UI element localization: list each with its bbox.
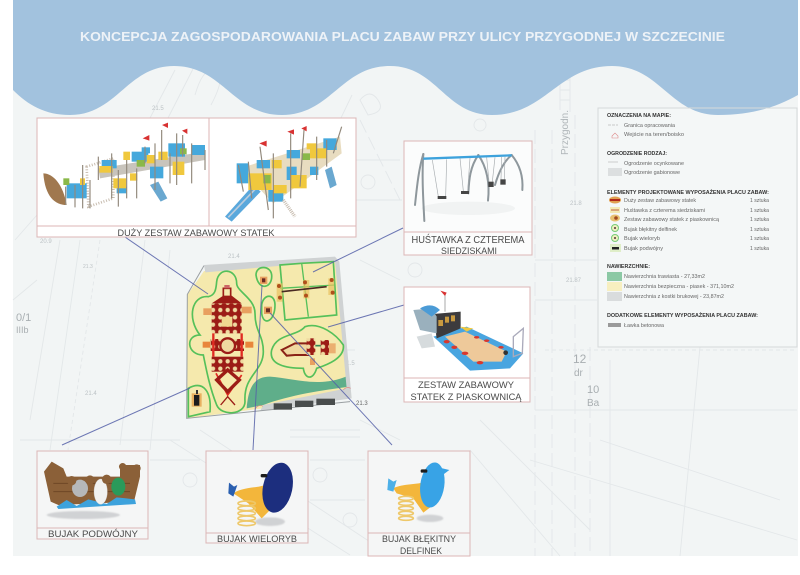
caption: BUJAK BŁĘKITNY <box>382 534 456 544</box>
legend group: equipment: Bujak podwójny <box>624 246 664 252</box>
play structure: ship with sandpit <box>282 338 336 365</box>
map background: Przygodn. <box>560 110 571 155</box>
play structure: swing <box>277 278 335 302</box>
caption: STATEK Z PIASKOWNICĄ <box>410 392 522 403</box>
legend group: fencing: Ogrodzenie ocynkowane <box>624 161 684 167</box>
panel: dolphin rocker <box>368 451 470 556</box>
map background: dr <box>574 368 584 379</box>
map background: 21.4 <box>85 391 97 397</box>
panel: ship with sandpit <box>404 287 530 403</box>
play structure: large ship <box>203 285 253 405</box>
legend group: equipment: 1 sztuka <box>750 236 769 242</box>
map background: 21.3 <box>356 401 368 407</box>
connector lines <box>62 228 404 450</box>
header wave band <box>13 0 798 115</box>
surface: grass <box>247 376 350 408</box>
caption <box>412 233 524 257</box>
image: sandpit ship <box>413 291 523 371</box>
legend group: equipment: Huśtawka z czterema siedziskami <box>624 208 705 214</box>
map background: 10 <box>587 384 599 396</box>
legend group: additional <box>607 312 758 329</box>
map background: 21.5 <box>343 361 355 367</box>
entrances <box>255 388 351 411</box>
legend group: equipment: Duży zestaw zabawowy statek <box>624 198 697 204</box>
panel: swing <box>404 141 532 257</box>
legend group: equipment: ELEMENTY PROJEKTOWANE WYPOSAŻENIA PLACU ZABAW: <box>607 189 769 196</box>
image: double rocker <box>44 462 141 519</box>
caption: BUJAK PODWÓJNY <box>48 529 138 539</box>
caption: DUŻY ZESTAW ZABAWOWY STATEK <box>118 228 275 239</box>
map background: 21.87 <box>566 278 582 284</box>
image: dolphin rocker <box>387 461 449 522</box>
legend group: surfaces <box>607 264 734 301</box>
caption <box>382 534 456 556</box>
panel: double rocker <box>37 451 148 539</box>
legend group: map markings <box>607 113 684 138</box>
legend group: equipment: 1 sztuka <box>750 208 769 214</box>
legend group: map markings: OZNACZENIA NA MAPIE: <box>607 113 671 119</box>
legend group: equipment: Bujak wieloryb <box>624 236 660 242</box>
legend group: fencing: Ogrodzenie gabionowe <box>624 170 680 176</box>
legend group: surfaces: Nawierzchnia bezpieczna - piasek - 371,10m2 <box>624 284 734 290</box>
map background: IIIb <box>16 325 29 335</box>
caption: BUJAK WIELORYB <box>217 534 297 544</box>
legend group: surfaces: Nawierzchnia z kostki brukowej - 23,87m2 <box>624 294 724 300</box>
play structure: whale rocker <box>260 277 267 284</box>
legend group: equipment: Bujak błękitny delfinek <box>624 227 678 233</box>
image: ship structures <box>43 123 342 222</box>
caption <box>410 380 522 403</box>
panel: large play ship <box>37 118 356 239</box>
map background: 12 <box>573 352 587 366</box>
surface: paving and fence <box>204 257 352 411</box>
map background: 21.8 <box>570 201 582 207</box>
caption: ZESTAW ZABAWOWY <box>418 380 515 391</box>
panel: legend <box>598 108 797 347</box>
legend group: fencing <box>607 151 684 176</box>
legend group: equipment: 1 sztuka <box>750 198 769 204</box>
benches <box>274 399 335 410</box>
caption: SIEDZISKAMI <box>441 246 497 257</box>
legend group: fencing: OGRODZENIE RODZAJ: <box>607 151 667 157</box>
map background: Ba <box>587 398 600 409</box>
map background: 21.3 <box>83 264 93 270</box>
title: KONCEPCJA ZAGOSPODAROWANIA PLACU ZABAW PRZY ULICY PRZYGODNEJ W SZCZECINIE <box>80 30 725 44</box>
legend group: additional: Ławka betonowa <box>624 323 664 329</box>
legend group: additional: DODATKOWE ELEMENTY WYPOSAŻENIA PLACU ZABAW: <box>607 312 758 319</box>
legend group: map markings: Wejście na teren/boisko <box>624 132 684 138</box>
surface: sand <box>187 260 350 418</box>
map background: 21.4 <box>228 254 240 260</box>
legend group: surfaces: Nawierzchnia trawiasta - 27,33m2 <box>624 274 705 280</box>
caption: HUŚTAWKA Z CZTEREMA <box>412 233 524 246</box>
image: swing set <box>415 154 523 221</box>
legend group: equipment: 1 sztuka <box>750 217 769 223</box>
site plan <box>187 257 352 418</box>
image: whale rocker <box>228 460 297 526</box>
panel: whale rocker <box>206 451 308 544</box>
play structure: dolphin rocker <box>264 307 272 314</box>
legend group: equipment: Zestaw zabawowy statek z piaskownicą <box>624 217 719 223</box>
legend group: map markings: Granica opracowania <box>624 123 675 129</box>
safety zones <box>188 262 343 417</box>
legend group: surfaces: NAWIERZCHNIE: <box>607 264 650 270</box>
caption: DELFINEK <box>400 546 442 556</box>
play structure: double rocker <box>192 390 202 407</box>
legend group: equipment <box>607 189 769 252</box>
legend group: equipment: 1 sztuka <box>750 246 769 252</box>
map background: 0/1 <box>16 312 31 324</box>
map background: 21.5 <box>152 106 164 112</box>
legend group: equipment: 1 sztuka <box>750 227 769 233</box>
map background: 20.9 <box>40 239 52 245</box>
